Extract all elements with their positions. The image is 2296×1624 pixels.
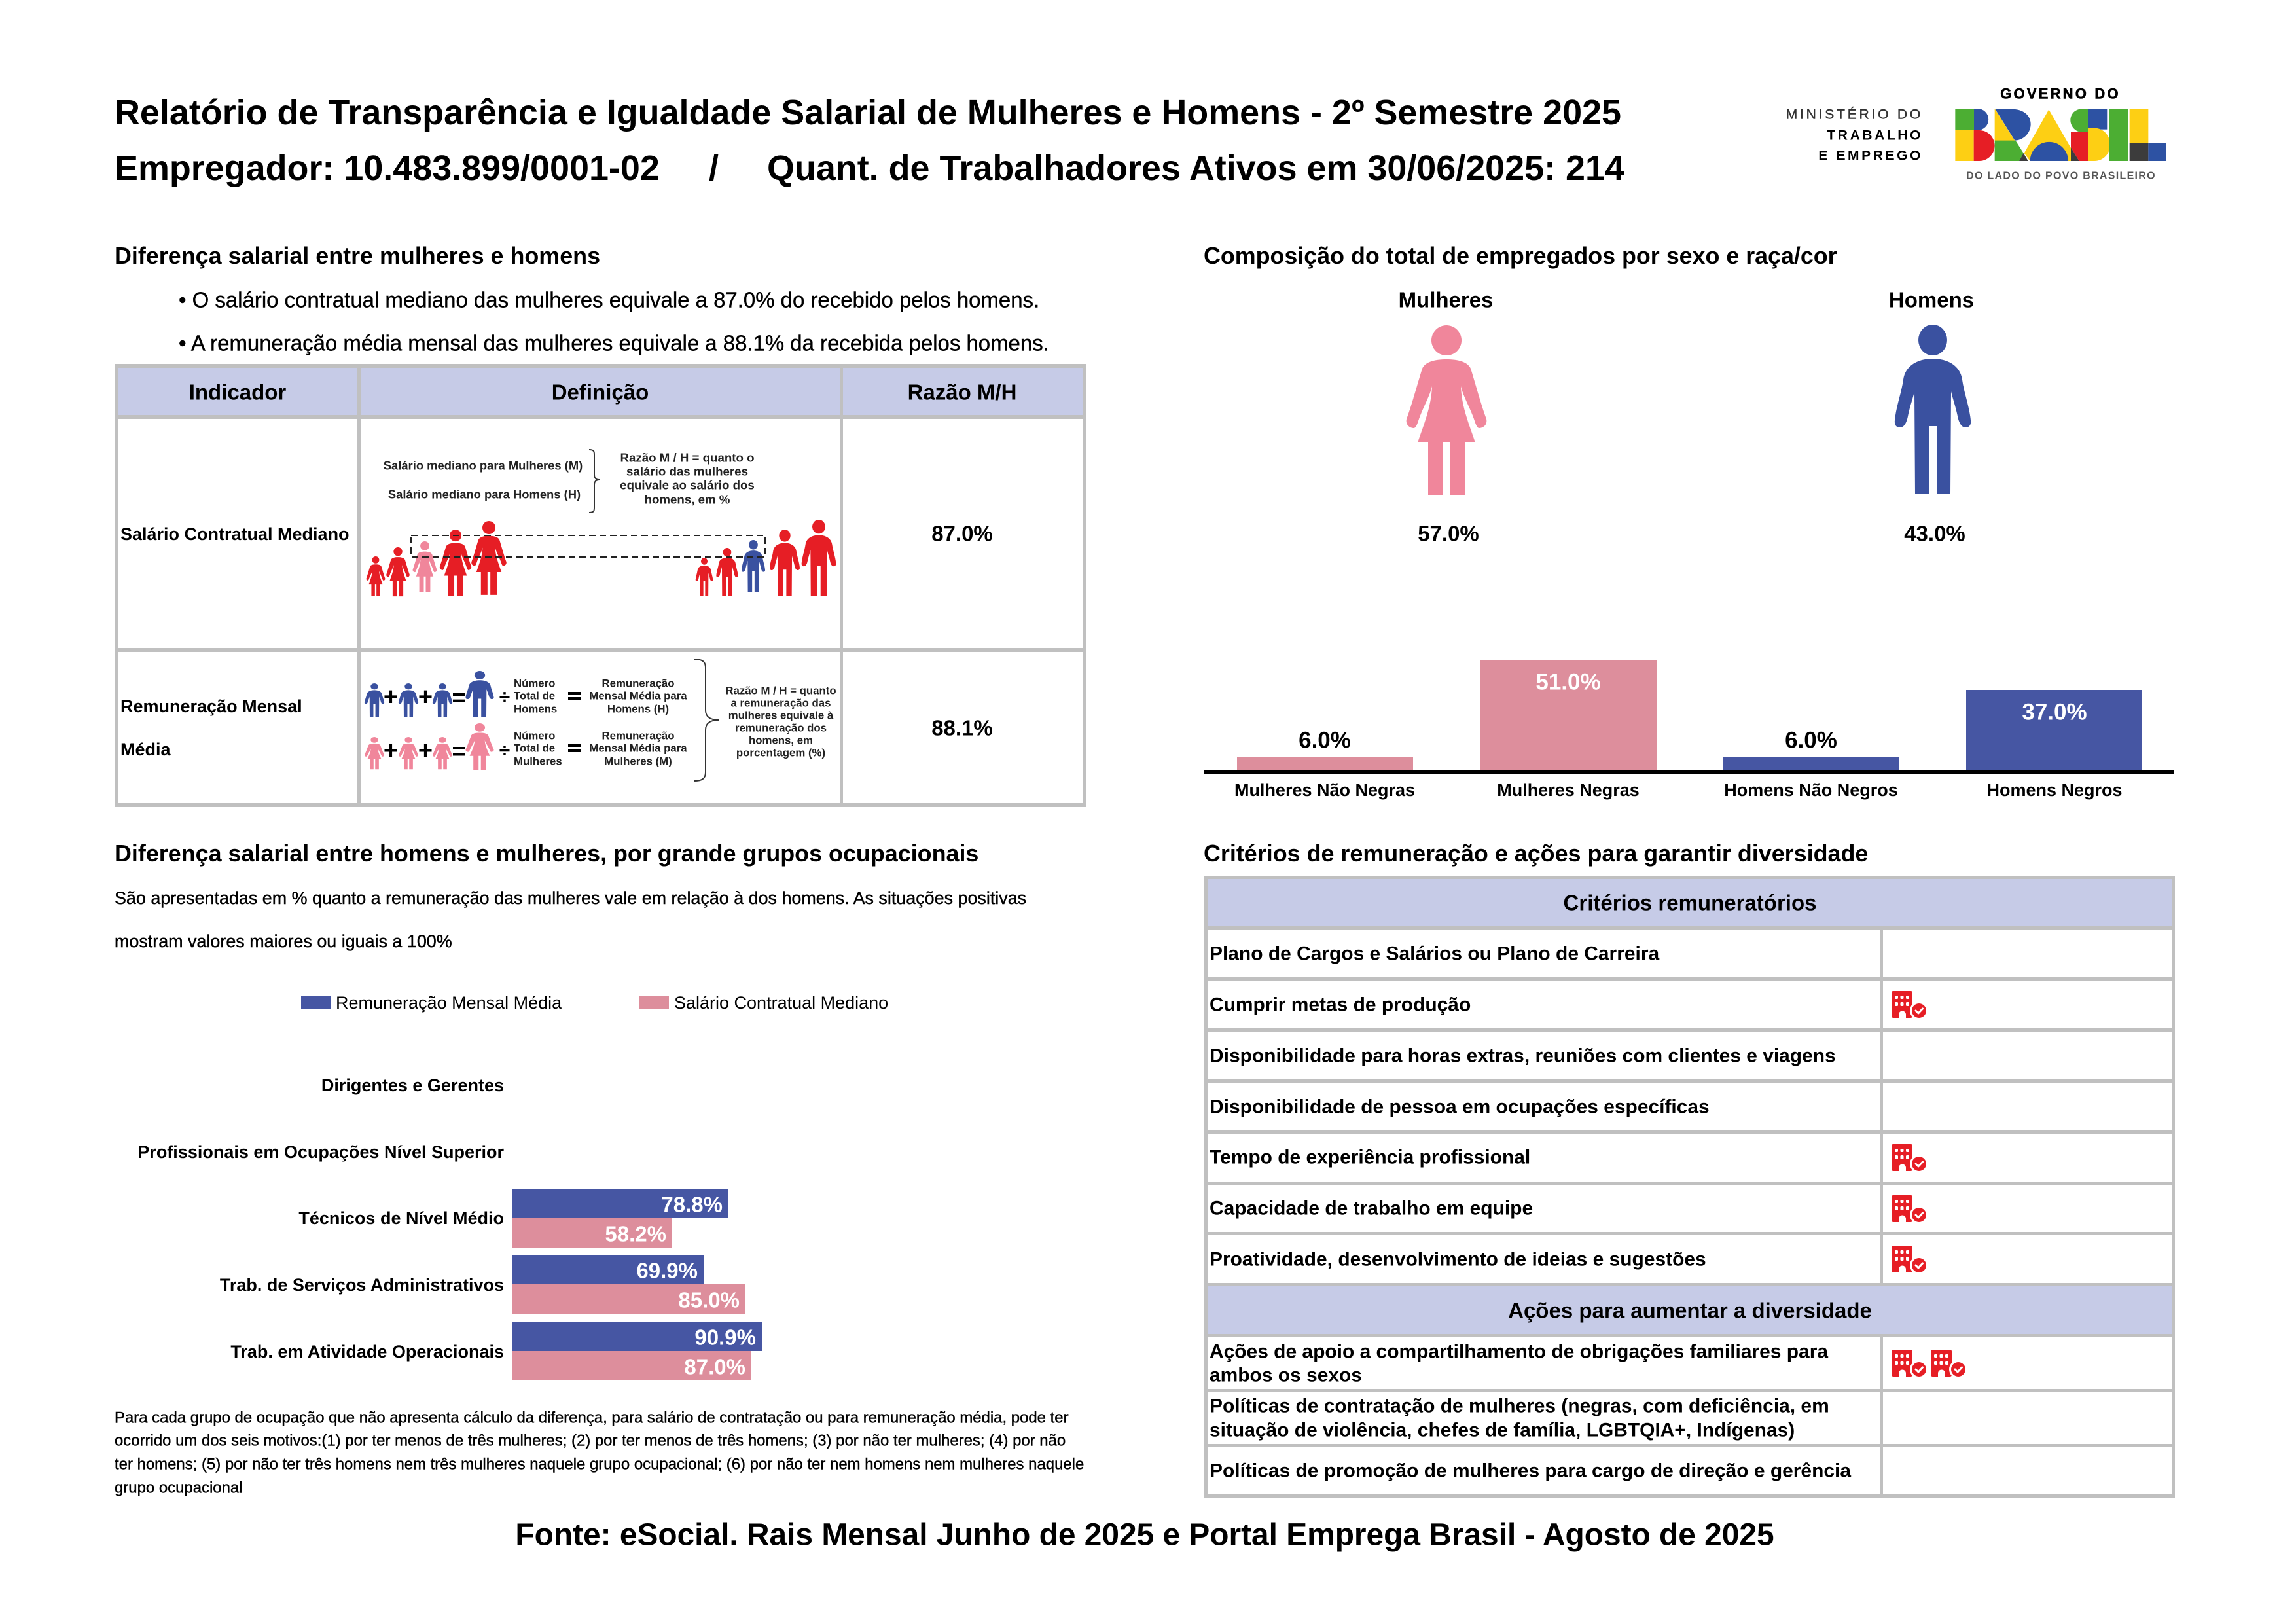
diagram: mean pay: ÷ [499,686,510,708]
diagram: median salary: equivale ao salário dos [620,478,755,492]
diagram: mean pay [365,659,836,781]
bar chart: sexo e raça/cor [1204,660,2174,800]
panel: composição mulheres: Mulheres [1399,288,1493,312]
panel: indicator table [115,364,1086,807]
logo: Governo do Brasil [1955,85,2166,182]
diagram: mean pay: = [452,683,466,711]
text block: footnote: ter homens; (5) por não ter três homens nem três mulheres naquele grupo ocupacional; (6) por não ter nem homens nem mulheres naquele [115,1456,1084,1473]
bar chart: grupos ocupacionais: 85.0% [678,1288,740,1312]
title: Relatório de Transparência e Igualdade Salarial de Mulheres e Homens - 2º Semestre 2025 [115,93,1621,132]
icon: company check [1892,1195,1928,1224]
text block: intro: São apresentadas em % quanto a remuneração das mulheres vale em relação à dos homens. As situações positivas [115,888,1026,908]
text block: bullets [179,288,1049,355]
bar chart: grupos ocupacionais: 87.0% [684,1355,745,1379]
bar chart: grupos ocupacionais: 69.9% [636,1258,698,1283]
panel: criteria table [1204,876,2175,1498]
diagram: mean pay: Total de [514,742,555,754]
table headers: Razão M/H [908,380,1016,405]
panel: composição homens: Homens [1889,288,1974,312]
diagram: mean pay: Mulheres [514,755,562,767]
table header: ações: Ações para aumentar a diversidade [1508,1299,1872,1322]
diagram: mean pay: homens, em [749,734,813,746]
value: 87.0%: 87.0% [931,521,993,546]
diagram: mean pay: + [418,683,433,711]
criteria list [1210,943,1836,1270]
diagram: mean pay: Total de [514,690,555,702]
diagram: mean pay: Homens (H) [607,703,669,715]
text block: intro: mostram valores maiores ou iguais a 100% [115,931,452,951]
diagram: mean pay: + [418,737,433,765]
bar chart: sexo e raça/cor: 6.0% [1785,728,1837,753]
footer source: Fonte: eSocial. Rais Mensal Junho de 2025 e Portal Emprega Brasil - Agosto de 2025 [515,1517,1774,1553]
diagram: mean pay: Número [514,729,555,742]
icon: company check [1892,991,1928,1020]
bar chart: sexo e raça/cor: Homens Não Negros [1724,780,1898,800]
bar chart: grupos ocupacionais: Dirigentes e Gerentes [321,1075,504,1095]
title: Empregador: 10.483.899/0001-02 [115,149,660,188]
text block: bullets: • O salário contratual mediano das mulheres equivale a 87.0% do recebido pelos homens. [179,288,1039,312]
title [115,93,1624,188]
icon: company check [1931,1350,1967,1379]
bar chart: sexo e raça/cor: Mulheres Não Negras [1234,780,1415,800]
text block: footnote: ocorrido um dos seis motivos:(1) por ter menos de três mulheres; (2) por ter menos de três homens; (3) por não ter mulheres; (4) por não [115,1432,1066,1449]
bar chart: sexo e raça/cor: 37.0% [2022,699,2087,725]
panel: composição mulheres [1399,288,1493,546]
row label: remuneração mensal média [120,696,302,759]
diagram: mean pay: + [384,737,398,765]
diagram: mean pay: Remuneração [602,729,674,742]
text block: footnote: Para cada grupo de ocupação que não apresenta cálculo da diferença, para salário de contratação ou para remuneração média, pode ter [115,1409,1069,1427]
table header: critérios remuneratórios: Critérios remuneratórios [1564,890,1816,915]
icon: woman [1407,325,1486,495]
bar chart: sexo e raça/cor: 6.0% [1299,728,1351,753]
diagram: mean pay: Mensal Média para [589,742,687,754]
logo: Governo do Brasil: DO LADO DO POVO BRASILEIRO [1966,170,2156,182]
bar chart: grupos ocupacionais: Técnicos de Nível Médio [298,1208,504,1228]
panel: composição homens [1889,288,1974,546]
diagram: mean pay: mulheres equivale à [728,710,834,721]
icon: company check [1892,1144,1928,1173]
icon: man [1895,325,1971,494]
bar chart: grupos ocupacionais: 58.2% [605,1221,666,1246]
row label: remuneração mensal média: Média [120,740,171,759]
diagram: median salary: salário das mulheres [626,465,748,478]
criteria list: Tempo de experiência profissional [1210,1147,1530,1168]
actions list: Políticas de promoção de mulheres para cargo de direção e gerência [1210,1460,1851,1482]
diagram: mean pay: Remuneração [602,677,674,690]
diagram: mean pay: porcentagem (%) [736,746,825,759]
table headers: Definição [552,380,649,405]
diagram: median salary: Salário mediano para Mulheres (M) [384,458,583,473]
actions list: ambos os sexos [1210,1364,1362,1386]
bar chart: sexo e raça/cor: Mulheres Negras [1497,780,1640,800]
diagram: median salary: Razão M / H = quanto o [620,450,755,465]
logo: Governo do Brasil: GOVERNO DO [2000,85,2121,102]
actions list [1210,1341,1851,1482]
legend [301,993,888,1013]
panel: composição mulheres: 57.0% [1418,521,1479,546]
text block: bullets: • A remuneração média mensal das mulheres equivale a 88.1% da recebida pelos homens. [179,331,1049,355]
actions list: situação de violência, chefes de família, LGBTQIA+, Indígenas) [1210,1419,1795,1441]
text block: intro [115,888,1026,951]
diagram: mean pay: a remuneração das [731,696,831,710]
text block: footnote [115,1409,1084,1496]
heading: composição: Composição do total de empregados por sexo e raça/cor [1204,243,1837,269]
table headers [189,380,1016,405]
logo: Ministério do Trabalho e Emprego: E EMPREGO [1818,148,1923,164]
bar chart: sexo e raça/cor: Homens Negros [1986,780,2123,800]
bar chart: grupos ocupacionais: 78.8% [661,1193,723,1216]
diagram: median salary [367,450,836,596]
criteria list: Cumprir metas de produção [1210,994,1471,1016]
icon: company check [1892,1246,1928,1274]
row label: remuneração mensal média: Remuneração Mensal [120,696,302,716]
actions list: Políticas de contratação de mulheres (negras, com deficiência, em [1210,1396,1829,1416]
actions list: Ações de apoio a compartilhamento de obrigações familiares para [1210,1341,1828,1363]
bar chart: grupos ocupacionais: Trab. em Atividade Operacionais [230,1342,504,1362]
criteria list: Proatividade, desenvolvimento de ideias e sugestões [1210,1249,1706,1270]
diagram: mean pay: Homens [514,703,557,715]
title: Quant. de Trabalhadores Ativos em 30/06/2025: 214 [767,149,1624,188]
diagram: mean pay: + [384,683,398,711]
heading: diferença salarial: Diferença salarial entre mulheres e homens [115,243,600,269]
diagram: median salary: Salário mediano para Homens (H) [388,487,581,501]
diagram: mean pay: Mensal Média para [589,690,687,702]
legend: Remuneração Mensal Média [336,993,562,1013]
bar chart: sexo e raça/cor: 51.0% [1535,669,1601,695]
diagram: mean pay: Número [514,677,555,690]
bar chart: grupos ocupacionais: Trab. de Serviços Administrativos [220,1275,504,1295]
diagram: mean pay: Razão M / H = quanto [725,685,836,696]
row label: salário contratual mediano: Salário Contratual Mediano [120,524,350,544]
diagram: mean pay: Mulheres (M) [604,755,672,767]
heading: critérios: Critérios de remuneração e ações para garantir diversidade [1204,840,1868,867]
diagram: median salary: homens, em % [645,492,730,507]
diagram: mean pay: ÷ [499,740,510,762]
bar chart: grupos ocupacionais: Profissionais em Ocupações Nível Superior [137,1142,504,1162]
criteria list: Disponibilidade para horas extras, reuniões com clientes e viagens [1210,1045,1836,1067]
heading: grupos ocupacionais: Diferença salarial entre homens e mulheres, por grande grupos ocupacionais [115,840,978,867]
diagram: mean pay: remuneração dos [735,721,827,734]
table headers: Indicador [189,380,286,405]
logo: Ministério do Trabalho e Emprego: MINISTÉRIO DO [1786,107,1923,122]
criteria list: Capacidade de trabalho em equipe [1210,1198,1533,1219]
panel: composição homens: 43.0% [1904,521,1965,546]
diagram: mean pay: = [452,737,466,765]
value: 88.1%: 88.1% [931,716,993,740]
bar chart: grupos ocupacionais [137,1056,762,1380]
icon: company check [1892,1350,1928,1379]
logo: Ministério do Trabalho e Emprego [1786,107,1923,164]
criteria list: Disponibilidade de pessoa em ocupações específicas [1210,1096,1710,1118]
logo: Ministério do Trabalho e Emprego: TRABALHO [1827,128,1923,143]
legend: Salário Contratual Mediano [674,993,888,1013]
title: / [709,149,719,188]
criteria list: Plano de Cargos e Salários ou Plano de Carreira [1210,943,1659,965]
text block: footnote: grupo ocupacional [115,1479,243,1496]
bar chart: grupos ocupacionais: 90.9% [694,1325,756,1350]
